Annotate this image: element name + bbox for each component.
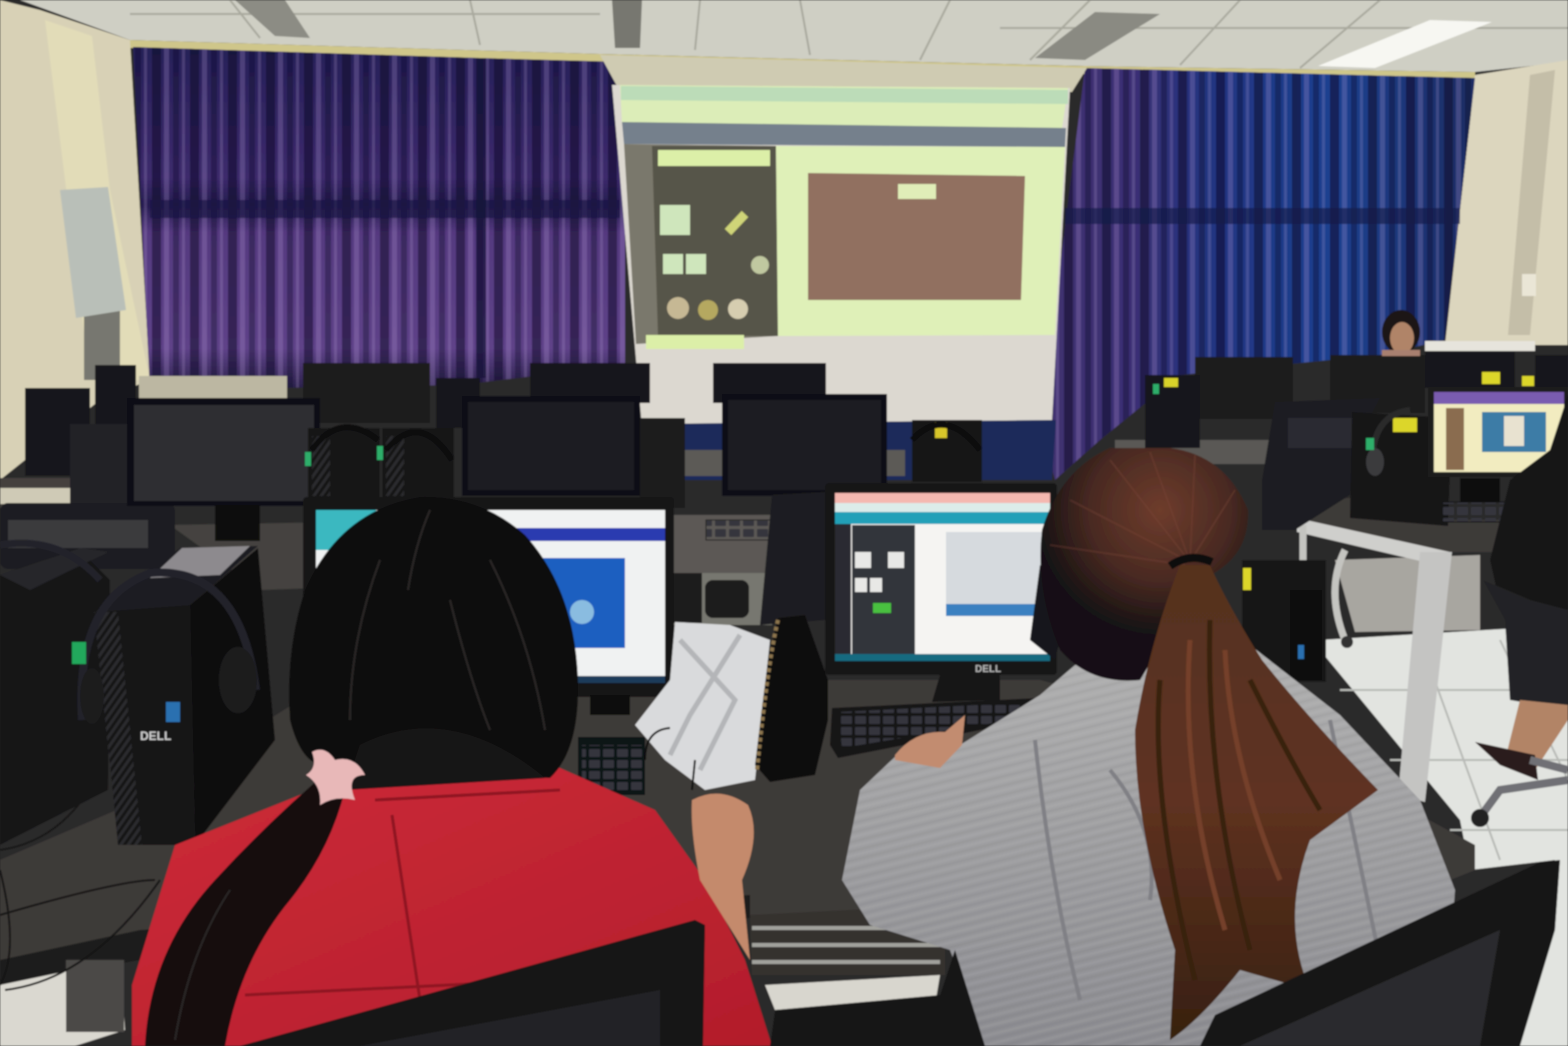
right wall	[1445, 60, 1568, 345]
back row monitors	[25, 341, 1568, 506]
hair tie	[1170, 558, 1212, 566]
monitor right foreground	[825, 483, 1057, 702]
presenter	[1382, 310, 1420, 356]
right side equipment	[1145, 372, 1568, 682]
face mask	[1030, 565, 1070, 660]
ceiling	[0, 0, 1568, 80]
middle row towers	[305, 420, 982, 498]
curtain right	[1040, 68, 1475, 480]
middle row monitors	[127, 394, 887, 625]
projection screen	[600, 55, 1087, 428]
seated person at right	[1471, 395, 1568, 827]
middle desk	[0, 440, 1355, 625]
hair	[289, 497, 578, 778]
projected canva interface	[620, 85, 1068, 128]
keyboard	[830, 698, 1042, 758]
right side table	[1297, 498, 1510, 802]
left wall	[0, 0, 150, 480]
hair	[1040, 448, 1248, 681]
curtain left	[133, 47, 625, 390]
woman right	[770, 448, 1560, 1046]
computer towers left: DELL	[140, 729, 171, 743]
monitor right foreground: DELL	[975, 664, 1001, 675]
black handbag	[755, 615, 828, 782]
plastic bag	[635, 622, 770, 790]
red shirt	[132, 768, 772, 1046]
right side floor	[1320, 555, 1568, 1046]
scrunchie	[306, 750, 365, 805]
foreground desk	[0, 680, 1475, 1046]
hand	[692, 794, 754, 960]
grey hoodie	[842, 645, 1455, 1046]
chair left	[240, 920, 705, 1046]
back wall base	[0, 420, 1056, 508]
monitor left foreground	[303, 497, 674, 715]
chair right	[1200, 860, 1560, 1046]
woman left	[132, 497, 772, 1046]
hand	[895, 715, 965, 768]
keypad	[578, 737, 645, 795]
computer towers left	[0, 543, 275, 990]
